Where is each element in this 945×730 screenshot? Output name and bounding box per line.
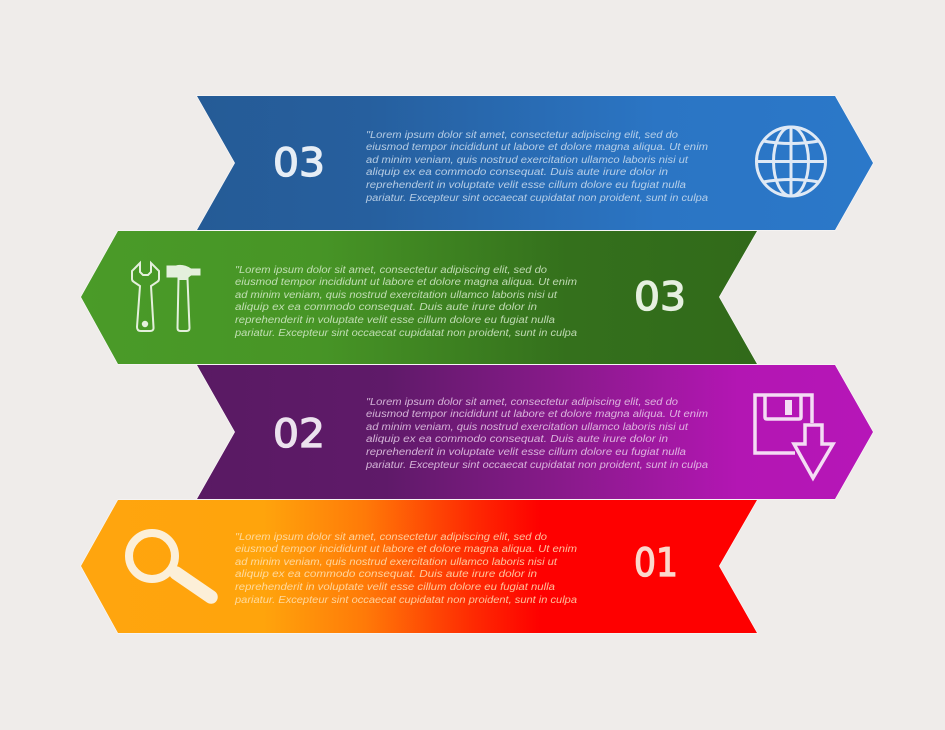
text block purple: ad minim veniam, quis nostrud exercitation ullamco laboris nisi ut [366, 422, 689, 433]
orange-red arrow shape [81, 500, 757, 633]
text block blue: eiusmod tempor incididunt ut labore et dolore magna aliqua. Ut enim [366, 142, 708, 153]
text block orange-red: ad minim veniam, quis nostrud exercitation ullamco laboris nisi ut [235, 557, 558, 568]
text block green: "Lorem ipsum dolor sit amet, consectetur adipiscing elit, sed do [235, 265, 547, 276]
icon: globe [756, 127, 826, 196]
text block purple: "Lorem ipsum dolor sit amet, consectetur adipiscing elit, sed do [366, 397, 678, 408]
number 02: 02 [273, 412, 325, 457]
text block green: ad minim veniam, quis nostrud exercitation ullamco laboris nisi ut [235, 290, 558, 301]
text block orange-red: aliquip ex ea commodo consequat. Duis aute irure dolor in [235, 569, 537, 580]
number 03 green: 03 [634, 275, 686, 320]
icon: wrench and hammer [132, 263, 200, 331]
panel: purple arrow 02 [197, 365, 873, 499]
text block purple [365, 397, 708, 471]
text block orange-red: pariatur. Excepteur sint occaecat cupidatat non proident, sunt in culpa [234, 595, 577, 606]
text block blue [365, 130, 708, 204]
text block purple: pariatur. Excepteur sint occaecat cupidatat non proident, sunt in culpa [365, 460, 708, 471]
text block orange-red: "Lorem ipsum dolor sit amet, consectetur adipiscing elit, sed do [235, 532, 547, 543]
icon: floppy disk with download arrow [755, 395, 833, 478]
icon: magnifying glass [129, 533, 211, 597]
text block blue: pariatur. Excepteur sint occaecat cupidatat non proident, sunt in culpa [365, 193, 708, 204]
text block green: eiusmod tempor incididunt ut labore et dolore magna aliqua. Ut enim [235, 277, 577, 288]
text block blue: ad minim veniam, quis nostrud exercitation ullamco laboris nisi ut [366, 155, 689, 166]
text block green [234, 265, 577, 339]
blue arrow shape [197, 96, 873, 230]
panel: green arrow 03 [81, 231, 757, 364]
text block purple: eiusmod tempor incididunt ut labore et dolore magna aliqua. Ut enim [366, 409, 708, 420]
text block purple: aliquip ex ea commodo consequat. Duis aute irure dolor in [366, 434, 668, 445]
panel: blue arrow 03 [197, 96, 873, 230]
text block orange-red: eiusmod tempor incididunt ut labore et dolore magna aliqua. Ut enim [235, 544, 577, 555]
number 03 blue: 03 [273, 141, 325, 186]
text block green: aliquip ex ea commodo consequat. Duis aute irure dolor in [235, 302, 537, 313]
text block purple: reprehenderit in voluptate velit esse cillum dolore eu fugiat nulla [366, 447, 686, 458]
text block green: reprehenderit in voluptate velit esse cillum dolore eu fugiat nulla [235, 315, 555, 326]
text block blue: "Lorem ipsum dolor sit amet, consectetur adipiscing elit, sed do [366, 130, 678, 141]
text block green: pariatur. Excepteur sint occaecat cupidatat non proident, sunt in culpa [234, 328, 577, 339]
panel: orange-red arrow 01 [81, 500, 757, 633]
text block blue: aliquip ex ea commodo consequat. Duis aute irure dolor in [366, 167, 668, 178]
text block blue: reprehenderit in voluptate velit esse cillum dolore eu fugiat nulla [366, 180, 686, 191]
text block orange-red [234, 532, 577, 606]
number 01: 01 [634, 541, 678, 586]
green arrow shape [81, 231, 757, 364]
purple arrow shape [197, 365, 873, 499]
text block orange-red: reprehenderit in voluptate velit esse cillum dolore eu fugiat nulla [235, 582, 555, 593]
